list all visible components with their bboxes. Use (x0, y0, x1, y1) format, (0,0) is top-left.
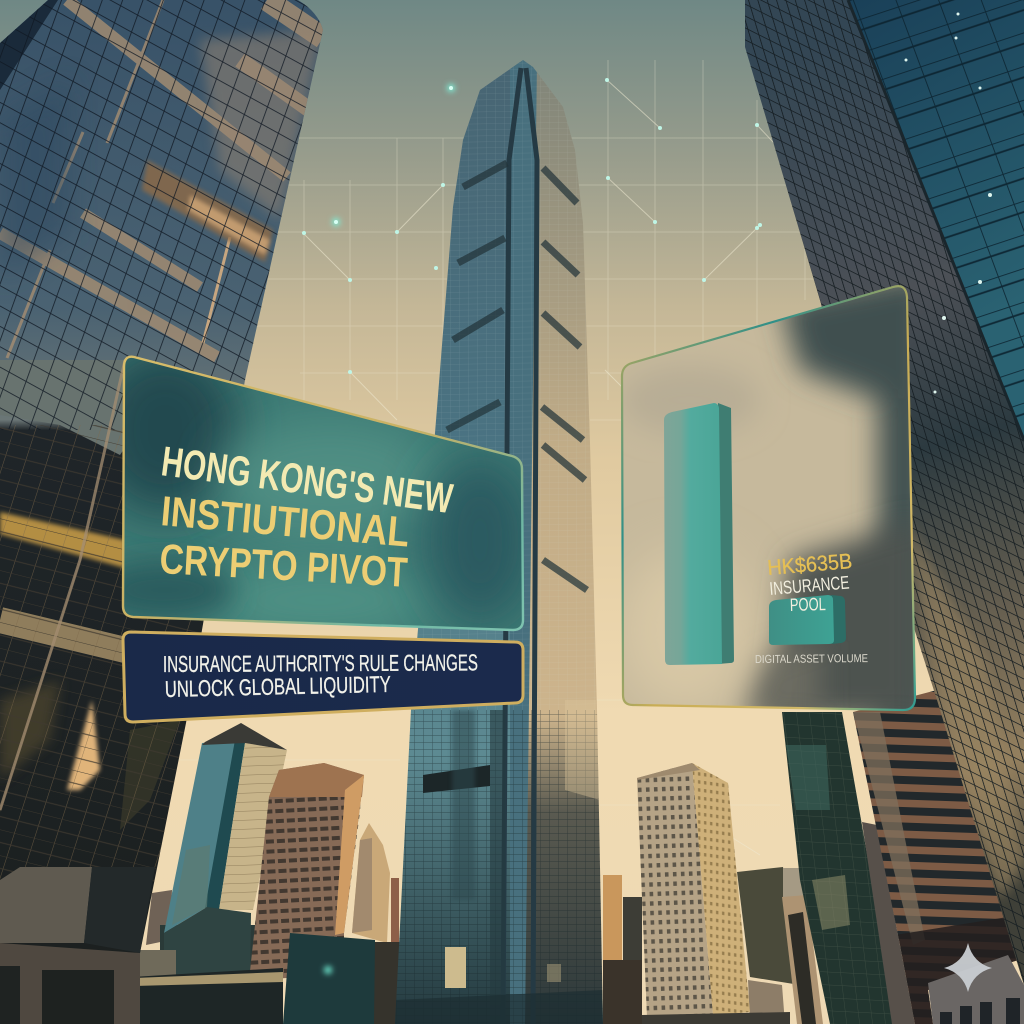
subtitle text: UNLOCK GLOBAL LIQUIDITY (165, 671, 391, 702)
headline text: INSTIUTIONAL (159, 487, 411, 556)
panel: subtitle banner (123, 632, 523, 722)
panel: headline sign (122, 356, 524, 632)
building: grey slab (862, 822, 915, 1024)
icon: sparkle watermark (944, 943, 992, 992)
bar: insurance pool (664, 403, 734, 665)
building: central tower (390, 60, 610, 1024)
panel: frosted glass chart (620, 285, 916, 712)
subtitle text: INSURANCE AUTHCRITY'S RULE CHANGES (163, 649, 478, 677)
chart labels (755, 549, 868, 666)
building: right glass skyscraper (740, 0, 1024, 1024)
building: glass tower lower left (160, 723, 287, 990)
headline text: CRYPTO PIVOT (158, 535, 409, 596)
distant low-rise skyline (146, 823, 823, 1024)
chart labels: DIGITAL ASSET VOLUME (755, 653, 868, 666)
building: low grey block lower right (928, 955, 1024, 1024)
building: beige tower lower right (637, 763, 790, 1024)
building: brick tower right (850, 680, 1024, 1024)
chart labels: POOL (790, 594, 826, 615)
chart labels: HK$635B (766, 549, 853, 580)
subtitle text (163, 649, 478, 702)
building: dark tower lower right (782, 712, 897, 1024)
chart labels: INSURANCE (769, 572, 850, 599)
building: brown tower lower left (249, 763, 364, 980)
sky network grid with glowing nodes (160, 60, 830, 855)
bar: digital asset volume (769, 595, 846, 645)
headline text: HONG KONG'S NEW (159, 437, 456, 522)
building: left glass skyscraper (0, 0, 330, 1024)
headline text (158, 437, 456, 596)
building: dark low podium and glass cube (132, 933, 375, 1024)
